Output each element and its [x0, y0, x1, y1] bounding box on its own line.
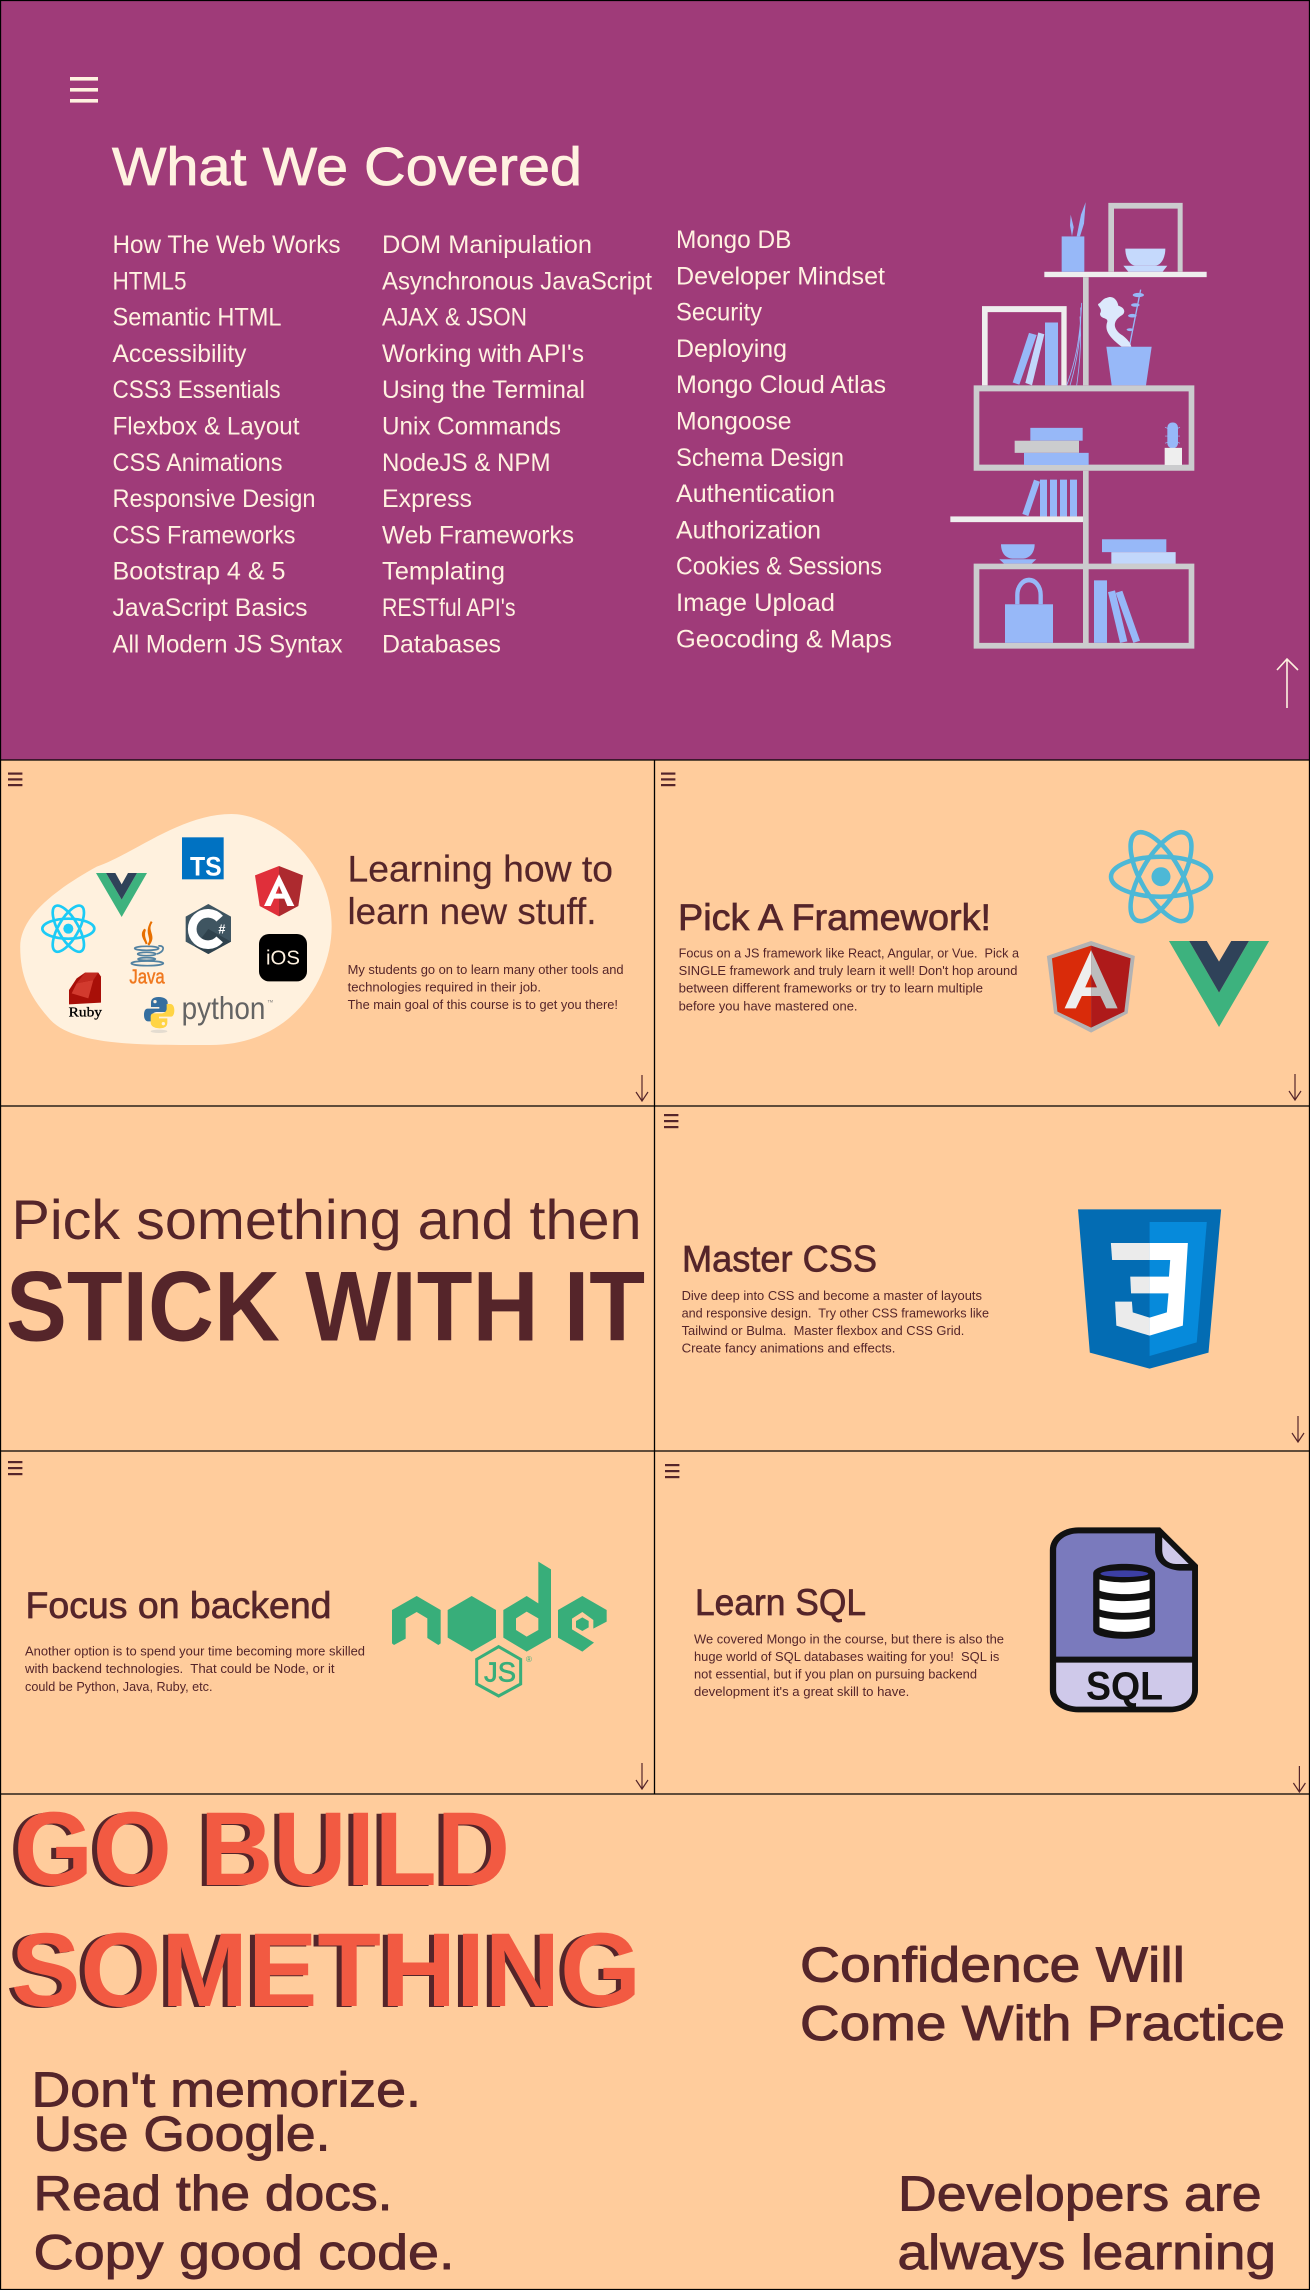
body text: Create fancy animations and effects. [682, 1342, 895, 1356]
text block: developers [898, 2168, 1276, 2280]
logo: Angular [255, 866, 303, 916]
logo: Java: Java [129, 965, 165, 988]
body text: Tailwind or Bulma. Master flexbox and CSS Grid. [682, 1324, 964, 1338]
title: What We Covered [112, 137, 582, 197]
heading: Learning how to [348, 849, 613, 890]
panel: learn sql [654, 1451, 1310, 1794]
list: column one: Responsive Design [112, 485, 316, 513]
body text: could be Python, Java, Ruby, etc. [25, 1680, 212, 1694]
list: column two: Templating [382, 558, 505, 586]
icon: menu [70, 77, 98, 103]
list: column one: CSS Frameworks [112, 521, 296, 549]
list: column three: Authorization [676, 516, 821, 544]
heading: Pick A Framework! [678, 897, 991, 938]
panel: stick with it [0, 1106, 654, 1451]
logo: TypeScript: TS [190, 852, 222, 882]
list: column one: Bootstrap 4 & 5 [112, 558, 286, 586]
body text [694, 1632, 1004, 1699]
heading: Master CSS [682, 1239, 877, 1280]
text block: advice: Copy good code. [34, 2226, 455, 2280]
list: column two: AJAX & JSON [382, 304, 527, 332]
list: column three: Schema Design [676, 444, 844, 472]
list: column three: Geocoding & Maps [676, 625, 892, 653]
body text: and responsive design. Try other CSS frameworks like [682, 1307, 989, 1321]
arrow: down [1292, 1416, 1304, 1442]
body text: before you have mastered one. [679, 1000, 858, 1014]
list: column one: CSS Animations [112, 449, 282, 477]
text block: advice: Use Google. [34, 2108, 330, 2162]
arrow: down [1289, 1074, 1301, 1100]
illustration: bookshelf [950, 202, 1207, 649]
list: column three: Security [676, 299, 762, 327]
logo: CSS3 shield [1078, 1209, 1221, 1369]
callout: pick something: Pick something and then [12, 1188, 642, 1251]
body text [679, 946, 1019, 1014]
body text: technologies required in their job. [348, 980, 541, 994]
logo: Node.js: ® [526, 1655, 532, 1664]
list: column two: Unix Commands [382, 412, 561, 440]
list: column three: Developer Mindset [676, 262, 885, 290]
arrow: down [1293, 1766, 1305, 1792]
list: column two: Asynchronous JavaScript [382, 267, 652, 295]
list: column three: Cookies & Sessions [676, 553, 882, 581]
list: column three: Mongo Cloud Atlas [676, 371, 886, 399]
headline: go build: GO BUILD [9, 1792, 505, 1909]
body text: Another option is to spend your time becoming more skilled [25, 1645, 365, 1659]
list: column two: Databases [382, 630, 501, 658]
panel: focus on backend [0, 1451, 654, 1794]
arrow: down [636, 1763, 648, 1789]
body text: Dive deep into CSS and become a master of layouts [682, 1289, 982, 1303]
list: column three: Image Upload [676, 589, 835, 617]
list: column two [382, 231, 652, 658]
logo: C sharp: # [218, 922, 225, 936]
list: column one: CSS3 Essentials [112, 376, 280, 404]
heading: Focus on backend [26, 1585, 332, 1626]
panel: pick a framework [654, 760, 1310, 1106]
body text [348, 963, 624, 1012]
body text: with backend technologies. That could be Node, or it [24, 1662, 335, 1676]
logo: Java [129, 922, 165, 988]
logo: iOS: iOS [266, 948, 300, 970]
text block: advice [32, 2064, 455, 2280]
logo: Python [144, 991, 273, 1033]
logo: Vue [96, 873, 147, 917]
body text: The main goal of this course is to get you there! [348, 998, 618, 1012]
logo: Angular [1047, 941, 1135, 1033]
body text: My students go on to learn many other tools and [348, 963, 624, 977]
logo: Ruby [69, 973, 102, 1021]
headline: something: SOMETHING [6, 1913, 636, 2030]
list: column one: Semantic HTML [112, 304, 282, 332]
text block: confidence [800, 1939, 1285, 2051]
logos cluster [42, 837, 307, 1033]
logo: Node.js: JS [484, 1657, 516, 1688]
body text [682, 1289, 989, 1356]
list: column two: DOM Manipulation [382, 231, 592, 259]
body text: between different frameworks or try to learn multiple [679, 982, 983, 996]
list: column one [112, 231, 343, 658]
icon: menu [665, 1464, 679, 1478]
headline: something: SOMETHING [11, 1912, 641, 2029]
list: column one: Accessibility [112, 340, 247, 368]
list: column three: Deploying [676, 335, 787, 363]
list: column two: Express [382, 485, 472, 513]
arrow: down [636, 1075, 648, 1101]
icon: menu [8, 772, 22, 786]
icon: menu [664, 1114, 678, 1128]
list: column two: NodeJS & NPM [382, 449, 550, 477]
heading: Learn SQL [695, 1582, 866, 1623]
body text: SINGLE framework and truly learn it well! Don't hop around [679, 964, 1017, 978]
logo: C sharp [186, 904, 231, 954]
logo: React [42, 901, 94, 956]
text block: advice: Read the docs. [34, 2167, 392, 2221]
text block: confidence: Confidence Will [800, 1939, 1185, 1993]
icon: sql file: SQL [1086, 1664, 1163, 1708]
list: column three [676, 226, 892, 653]
list: column two: Using the Terminal [382, 376, 585, 404]
text block: developers: Developers are [898, 2168, 1262, 2222]
heading: learn new stuff. [348, 891, 596, 932]
blob background [20, 814, 332, 1045]
text block: advice: Don't memorize. [32, 2064, 421, 2118]
list: column two: Web Frameworks [382, 521, 574, 549]
list: column two: Working with API's [382, 340, 584, 368]
list: column three: Mongoose [676, 408, 792, 436]
list: column two: RESTful API's [382, 594, 516, 622]
body text: Focus on a JS framework like React, Angular, or Vue. Pick a [679, 946, 1019, 960]
list: column three: Authentication [676, 480, 835, 508]
logo: iOS [259, 934, 307, 981]
callout: stick with it: STICK WITH IT [6, 1251, 645, 1362]
body text: We covered Mongo in the course, but there is also the [694, 1632, 1004, 1646]
panel: what we covered [0, 0, 1310, 760]
headline: go build: GO BUILD [14, 1791, 510, 1908]
panel: master css [654, 1106, 1310, 1451]
heading [348, 849, 613, 932]
list: column one: All Modern JS Syntax [112, 630, 343, 658]
list: column one: How The Web Works [112, 231, 340, 259]
list: column three: Mongo DB [676, 226, 792, 254]
list: column one: Flexbox & Layout [112, 412, 300, 440]
icon: menu [661, 772, 675, 786]
logo: Ruby: Ruby [69, 1006, 102, 1021]
logo: Python: TM [268, 1000, 273, 1004]
panel: go build something [0, 1791, 1310, 2290]
body text: not essential, but if you plan on pursuing backend [694, 1668, 977, 1682]
logo: Python: python [182, 991, 265, 1026]
body text: huge world of SQL databases waiting for you! SQL is [694, 1650, 999, 1664]
logo: TypeScript [182, 837, 224, 882]
arrow: up [1277, 659, 1298, 708]
body text: development it's a great skill to have. [694, 1685, 909, 1699]
text block: developers: always learning [898, 2226, 1276, 2280]
icon: menu [8, 1461, 22, 1475]
icon: sql file [1050, 1527, 1198, 1712]
text block: confidence: Come With Practice [800, 1997, 1285, 2051]
panel: learning how to learn [0, 760, 654, 1106]
list: column one: JavaScript Basics [112, 594, 308, 622]
logo: React [1111, 823, 1211, 930]
list: column one: HTML5 [112, 267, 186, 295]
body text [24, 1645, 365, 1694]
logo: Node.js [392, 1562, 607, 1696]
logo: Vue [1169, 941, 1269, 1027]
